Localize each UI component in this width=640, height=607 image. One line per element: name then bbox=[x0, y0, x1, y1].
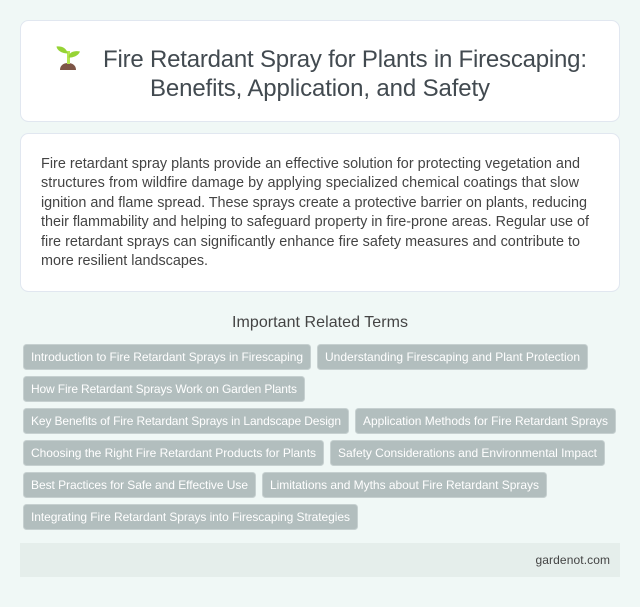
tag: limitations: Limitations and Myths about Fire Retardant Sprays bbox=[270, 478, 539, 492]
tag: introduction bbox=[24, 344, 310, 370]
title: Fire Retardant Spray for Plants in Firescaping: bbox=[103, 46, 587, 73]
heading: related terms: Important Related Terms bbox=[232, 314, 408, 331]
tag: understanding bbox=[318, 344, 588, 370]
panel: description bbox=[20, 134, 620, 292]
tag: safety: Safety Considerations and Environmental Impact bbox=[338, 446, 598, 460]
tag: choosing products bbox=[24, 440, 324, 466]
text block: description: Fire retardant spray plants provide an effective solution for protecting vegetation and bbox=[41, 156, 580, 172]
footer bbox=[20, 543, 620, 577]
title: Benefits, Application, and Safety bbox=[150, 75, 490, 102]
related term tags bbox=[24, 344, 616, 530]
tag: limitations bbox=[262, 472, 546, 498]
title bbox=[103, 46, 587, 102]
tag: integrating bbox=[24, 504, 358, 530]
tag: application methods bbox=[356, 408, 616, 434]
text block: description: ignition and flame spread. These sprays create a protective barrier on plants, reducing bbox=[41, 195, 587, 211]
tag: best practices: Best Practices for Safe and Effective Use bbox=[31, 478, 248, 492]
footer source text: gardenot.com bbox=[536, 553, 610, 567]
tag: how it works: How Fire Retardant Sprays Work on Garden Plants bbox=[31, 382, 297, 396]
text block: description: fire retardant sprays can significantly enhance fire safety measures and contribute to bbox=[41, 234, 580, 250]
text block: description: structures from wildfire damage by applying specialized chemical coatings that slow bbox=[41, 175, 580, 191]
tag: key benefits: Key Benefits of Fire Retardant Sprays in Landscape Design bbox=[31, 414, 341, 428]
tag: how it works bbox=[24, 376, 304, 402]
tag: understanding: Understanding Firescaping and Plant Protection bbox=[325, 350, 580, 364]
text block: description: more resilient landscapes. bbox=[41, 253, 208, 269]
tag: introduction: Introduction to Fire Retardant Sprays in Firescaping bbox=[31, 350, 303, 364]
tag: best practices bbox=[24, 472, 256, 498]
icon: seedling bbox=[56, 46, 80, 70]
panel: title card bbox=[20, 20, 620, 122]
tag: key benefits bbox=[24, 408, 348, 434]
tag: choosing products: Choosing the Right Fire Retardant Products for Plants bbox=[31, 446, 316, 460]
text block: description bbox=[41, 156, 590, 269]
text block: description: their flammability and helping to safeguard property in fire-prone areas. Regular use of bbox=[41, 214, 590, 230]
tag: safety bbox=[330, 440, 604, 466]
tag: application methods: Application Methods for Fire Retardant Sprays bbox=[363, 414, 608, 428]
tag: integrating: Integrating Fire Retardant Sprays into Firescaping Strategies bbox=[31, 510, 350, 524]
